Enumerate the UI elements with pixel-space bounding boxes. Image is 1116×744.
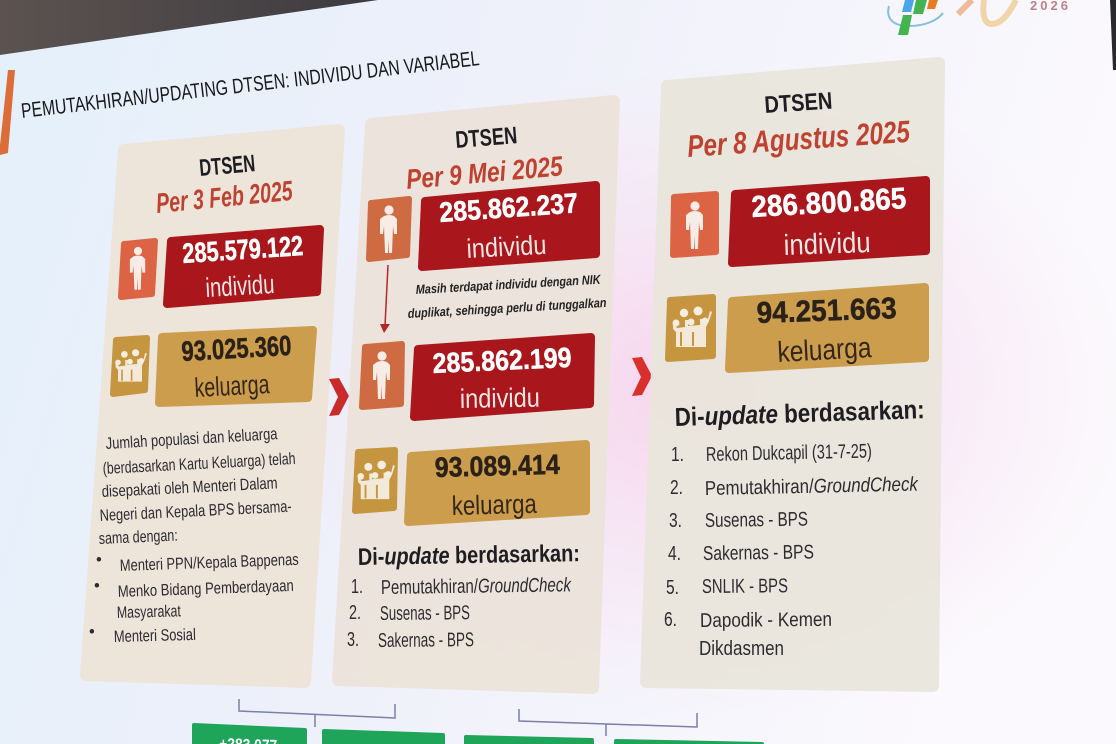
agreement text block: (berdasarkan Kartu Keluarga) telah xyxy=(102,450,296,478)
individual count box before correction: 285.862.237 xyxy=(438,187,579,228)
individual count box after correction: individu xyxy=(460,383,540,414)
family count box: 93.025.360 xyxy=(181,330,292,367)
NIK duplicate note: duplikat, sehingga perlu di tunggalkan xyxy=(407,295,607,321)
panel heading: DTSEN xyxy=(198,150,256,182)
arrow: down to corrected count xyxy=(380,265,390,333)
update sources list: 1. xyxy=(671,444,684,466)
icon: family xyxy=(355,450,395,511)
family count box: keluarga xyxy=(451,489,538,521)
dark right edge of the screen xyxy=(1110,0,1116,70)
panel background xyxy=(86,130,339,682)
individual count box before correction: individu xyxy=(466,230,547,264)
update sources list: 3. xyxy=(347,629,359,651)
update sources list: Pemutakhiran/GroundCheck xyxy=(381,574,572,599)
individual count box before correction xyxy=(422,185,596,267)
update sources list: 1. xyxy=(351,576,363,598)
update sources list: 5. xyxy=(666,577,679,599)
panel: DTSEN per 3 Feb 2025 xyxy=(86,130,339,682)
update sources list: 4. xyxy=(668,543,681,565)
arrow: chevron between panel 1 and 2 xyxy=(329,378,349,416)
icon: family xyxy=(113,338,147,394)
bracket: panel 1 to 2 change xyxy=(239,699,395,727)
agreement text block: • xyxy=(89,623,95,641)
panel: DTSEN per 8 Agustus 2025 xyxy=(646,63,939,686)
family count box xyxy=(408,444,586,522)
update sources list: 6. xyxy=(664,609,677,631)
agreement text block: Menko Bidang Pemberdayaan xyxy=(118,577,294,601)
dark ceiling above the screen xyxy=(0,0,378,55)
update sources list: Sakernas - BPS xyxy=(703,541,814,565)
update sources list: Dapodik - Kemen xyxy=(700,609,832,632)
panel date: Per 8 Agustus 2025 xyxy=(686,114,912,164)
agreement text block: Menteri Sosial xyxy=(114,626,196,646)
family count box xyxy=(729,287,925,369)
update sources list: Sakernas - BPS xyxy=(378,629,474,652)
agreement text block: • xyxy=(94,577,100,595)
family count box xyxy=(159,330,313,403)
individual count box: 285.579.122 xyxy=(181,230,304,269)
family count box: keluarga xyxy=(777,332,873,369)
individual count box xyxy=(732,180,926,263)
update sources list: Susenas - BPS xyxy=(380,602,470,625)
agreement text block: Jumlah populasi dan keluarga xyxy=(105,425,279,453)
agreement text block: disepakati oleh Menteri Dalam xyxy=(101,474,278,501)
update sources list xyxy=(664,441,919,660)
icon: person xyxy=(673,194,716,255)
update sources list: Pemutakhiran/GroundCheck xyxy=(705,474,919,500)
agreement text block: sama dengan: xyxy=(98,527,178,548)
update sources heading: Di-update berdasarkan: xyxy=(358,540,580,571)
icon: person xyxy=(369,199,409,259)
panel: DTSEN per 9 Mei 2025 xyxy=(338,101,614,688)
title: PEMUTAKHIRAN/UPDATING DTSEN: INDIVIDU DAN VARIABEL xyxy=(20,47,481,123)
update sources list xyxy=(347,574,572,652)
panel date: Per 9 Mei 2025 xyxy=(405,150,564,195)
update sources list: 2. xyxy=(349,602,361,624)
green delta box: individu 1 xyxy=(194,725,305,744)
icon: person xyxy=(362,344,402,407)
update sources list: Dikdasmen xyxy=(699,638,784,660)
individual count box after correction xyxy=(414,337,591,417)
family count box: 94.251.663 xyxy=(756,292,897,330)
agreement text block: Menteri PPN/Kepala Bappenas xyxy=(120,551,299,575)
individual count box after correction: 285.862.199 xyxy=(432,342,572,379)
NIK duplicate note xyxy=(407,272,607,321)
individual count box xyxy=(167,229,320,304)
agreement text block: Masyarakat xyxy=(117,602,181,622)
panel heading: DTSEN xyxy=(764,88,833,119)
green delta box: individu 2 xyxy=(466,737,592,744)
update sources list: SNLIK - BPS xyxy=(702,575,788,598)
panel background xyxy=(338,101,614,688)
individual count box: individu xyxy=(783,227,871,262)
NIK duplicate note: Masih terdapat individu dengan NIK xyxy=(415,272,602,297)
panel heading: DTSEN xyxy=(454,122,518,154)
logo and 2026 mark xyxy=(888,0,1071,35)
family count box: keluarga xyxy=(194,369,271,403)
individual count box: 286.800.865 xyxy=(751,182,907,224)
update sources heading: Di-update berdasarkan: xyxy=(674,394,925,432)
update sources list: Rekon Dukcapil (31-7-25) xyxy=(706,441,872,466)
update sources list: 3. xyxy=(669,510,682,532)
title accent bar xyxy=(0,70,15,155)
green delta box: keluarga 2 xyxy=(616,741,762,744)
bracket: panel 2 to 3 change xyxy=(519,709,697,736)
icon: person xyxy=(121,241,155,297)
green delta box: keluarga 1 xyxy=(324,731,443,744)
individual count box: individu xyxy=(205,269,275,303)
agreement text block xyxy=(89,425,299,646)
agreement text block: • xyxy=(96,551,102,569)
family count box: 93.089.414 xyxy=(434,449,560,483)
update sources list: Susenas - BPS xyxy=(705,509,808,532)
panel date: Per 3 Feb 2025 xyxy=(155,175,294,219)
icon: family xyxy=(668,297,713,359)
arrow: chevron between panel 2 and 3 xyxy=(632,357,652,396)
agreement text block: Negeri dan Kepala BPS bersama- xyxy=(99,498,292,525)
update sources list: 2. xyxy=(670,477,683,499)
pink glow on screen xyxy=(270,60,1116,720)
panel background xyxy=(646,63,939,686)
